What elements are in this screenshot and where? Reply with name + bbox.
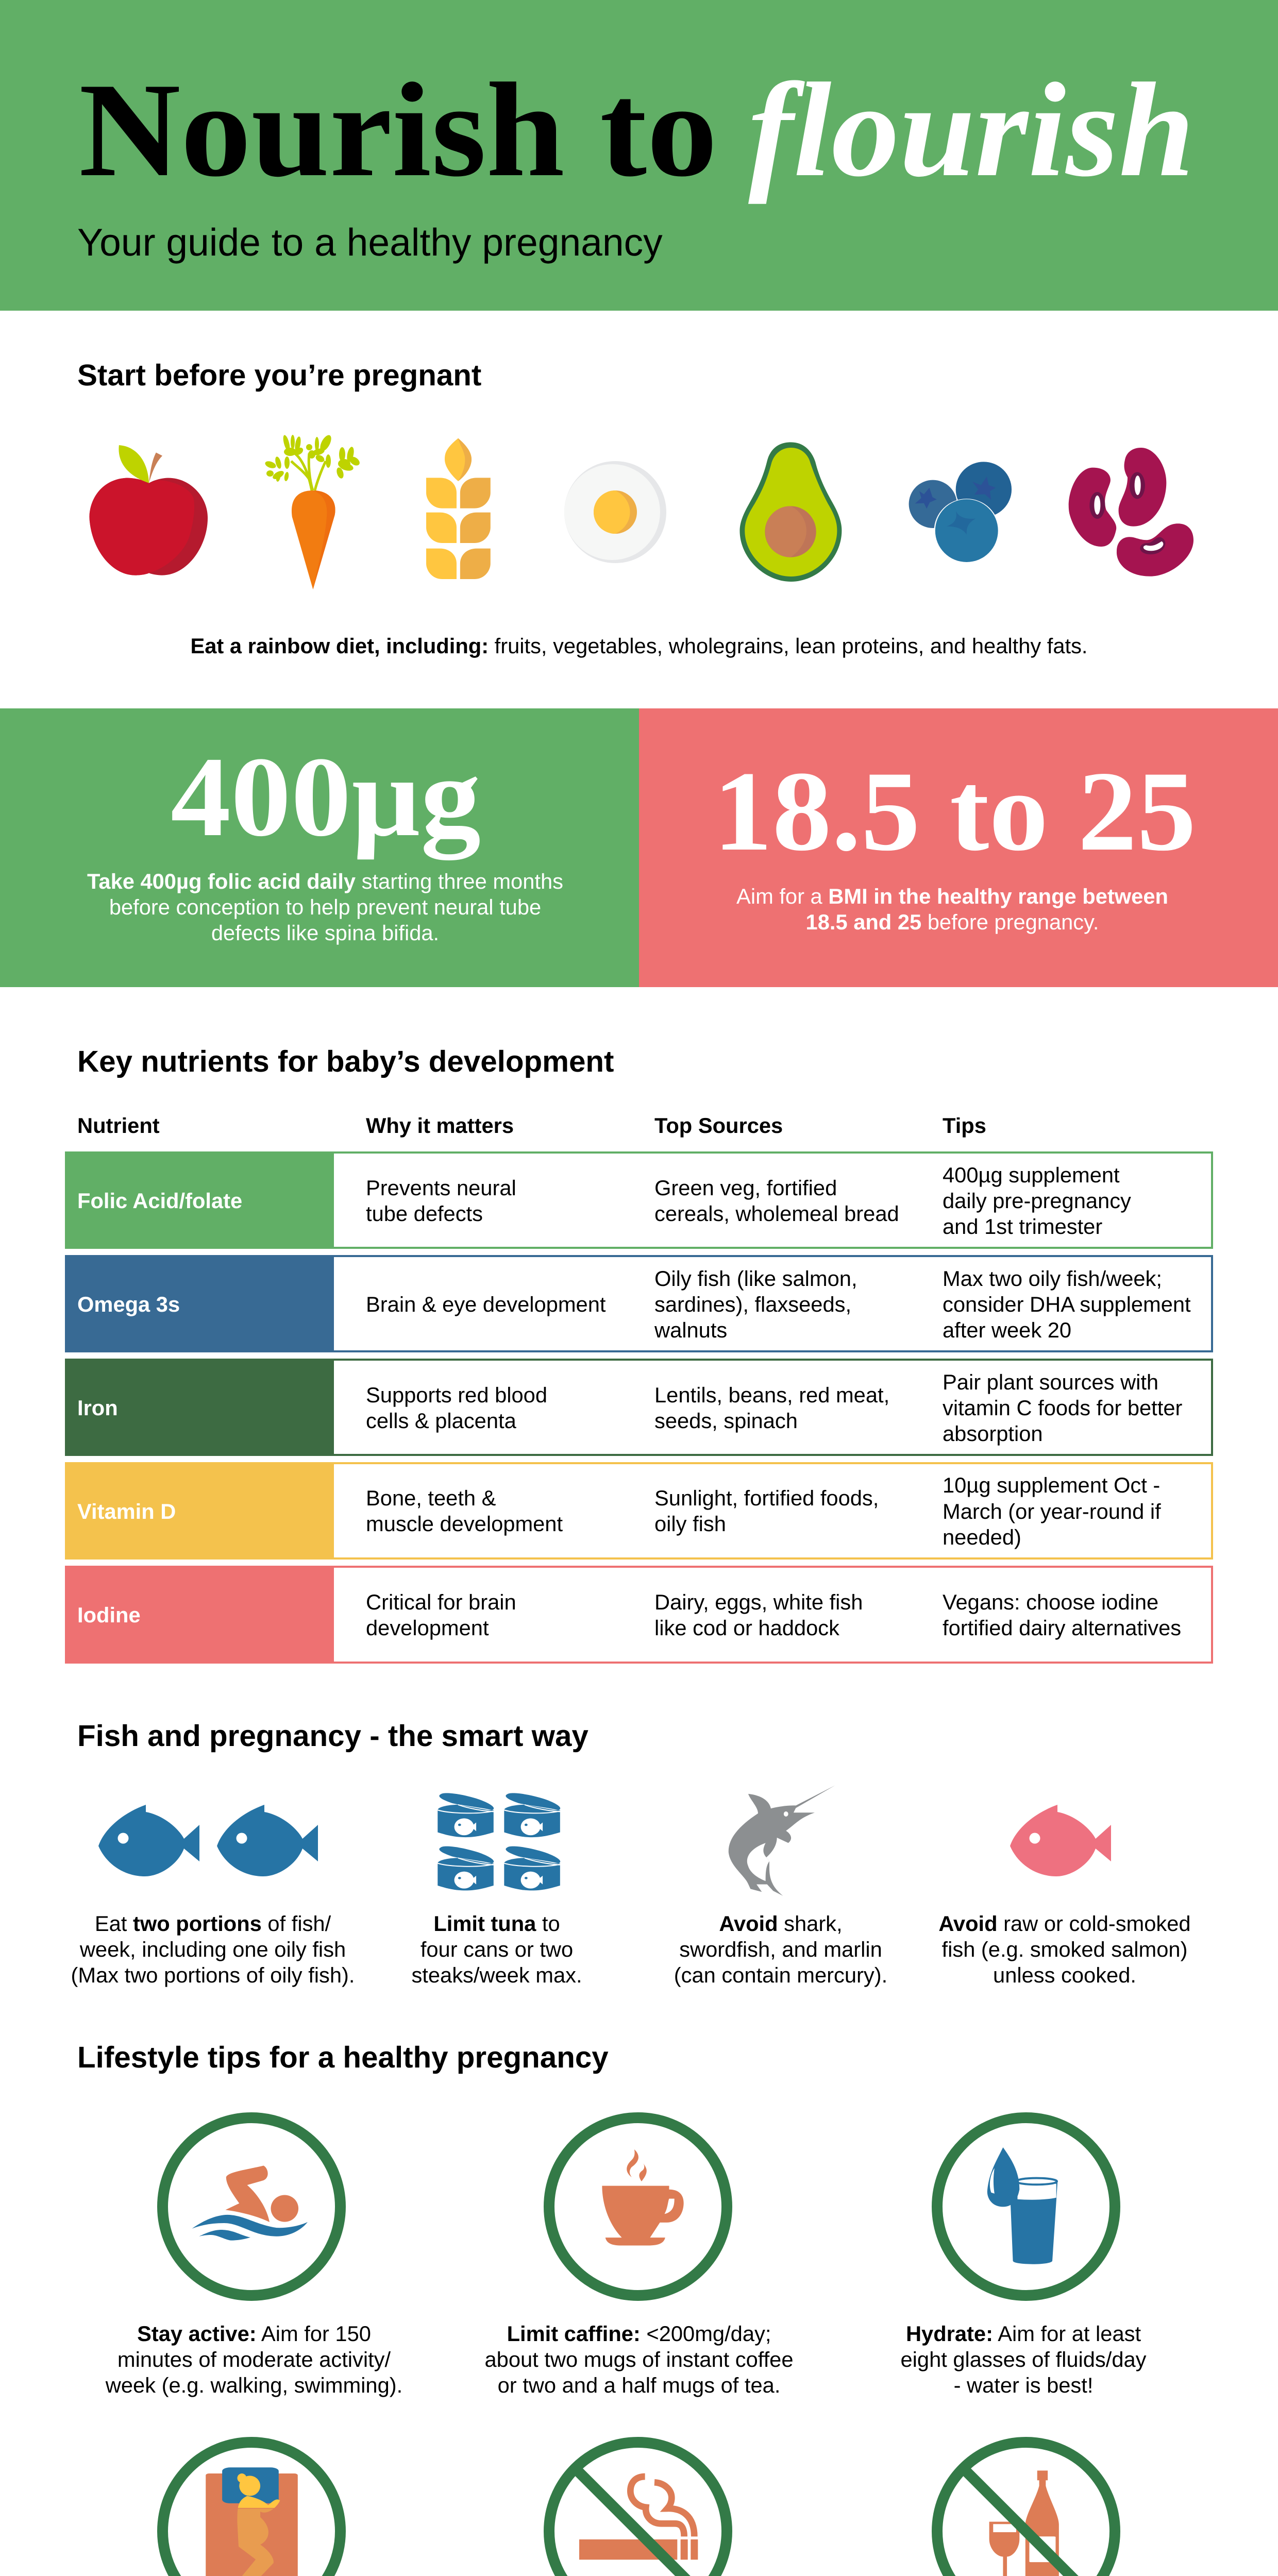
icon: no alcohol	[937, 2442, 1115, 2576]
heading: Fish and pregnancy - the smart way	[77, 1719, 588, 1753]
caption: avoid shark: swordfish, and marlin	[679, 1937, 882, 1961]
heading: Key nutrients for baby’s development	[77, 1045, 614, 1078]
icon: wheat	[426, 438, 491, 579]
row: vitamin D: Bone, teeth &	[366, 1486, 496, 1510]
row: iron: cells & placenta	[366, 1409, 517, 1433]
subtitle: Your guide to a healthy pregnancy	[77, 221, 663, 264]
row: folic acid: tube defects	[366, 1201, 483, 1226]
row: folic acid: Green veg, fortified	[654, 1176, 837, 1200]
icon: water glass	[937, 2117, 1115, 2296]
row: iron: Supports red blood	[366, 1383, 547, 1407]
table header: Top Sources	[654, 1113, 783, 1138]
row: vitamin D: Vitamin D	[77, 1499, 176, 1523]
row: omega 3s: after week 20	[943, 1318, 1071, 1342]
row: iodine: fortified dairy alternatives	[943, 1616, 1181, 1640]
row: vitamin D: March (or year-round if	[943, 1499, 1161, 1523]
title: Nourish to	[79, 55, 717, 205]
icon: marlin	[729, 1785, 835, 1896]
row: omega 3s: Oily fish (like salmon,	[654, 1266, 857, 1291]
heading: Lifestyle tips for a healthy pregnancy	[77, 2041, 609, 2074]
icon: carrot	[264, 433, 361, 589]
row: omega 3s: sardines), flaxseeds,	[654, 1292, 851, 1316]
caption: avoid raw fish: unless cooked.	[993, 1963, 1136, 1987]
text: BMI advice: Aim for a BMI in the healthy range between	[736, 884, 1168, 908]
icon: coffee cup	[549, 2117, 727, 2296]
row: iodine	[65, 1566, 1213, 1664]
panel: key nutrients	[65, 1045, 1213, 1664]
text: folic acid advice: Take 400µg folic acid daily starting three months	[87, 869, 563, 893]
stat: 18.5 to 25: 18.5 to 25	[713, 748, 1196, 875]
row: iodine: development	[366, 1616, 489, 1640]
heading: Start before you’re pregnant	[77, 359, 481, 392]
caption: limit tuna: four cans or two	[421, 1937, 573, 1961]
row: vitamin D: 10µg supplement Oct -	[943, 1473, 1160, 1497]
title	[79, 55, 1195, 205]
icon: two blue fish	[98, 1805, 318, 1876]
icon: apple	[89, 445, 208, 575]
text: BMI advice: 18.5 and 25	[806, 910, 921, 934]
caption: stay active: minutes of moderate activity/	[117, 2347, 391, 2371]
row: omega 3s: walnuts	[654, 1318, 727, 1342]
caption: hydrate: - water is best!	[954, 2373, 1093, 2397]
row: omega 3s	[65, 1255, 1213, 1352]
row: iodine: Critical for brain	[366, 1590, 516, 1614]
table header: Nutrient	[77, 1113, 160, 1138]
panel: BMI stat	[639, 708, 1278, 987]
text: folic acid advice: defects like spina bifida.	[211, 921, 439, 945]
caption: avoid shark: (can contain mercury).	[674, 1963, 887, 1987]
row: iodine: Dairy, eggs, white fish	[654, 1590, 863, 1614]
caption: limit tuna: Limit tuna to	[433, 1911, 560, 1936]
row: omega 3s: Max two oily fish/week;	[943, 1266, 1162, 1291]
row: folic acid: and 1st trimester	[943, 1214, 1102, 1239]
caption: rainbow diet: Eat a rainbow diet, including: fruits, vegetables, wholegrains, lean proteins, and healthy fats.	[190, 634, 1088, 658]
caption: hydrate: eight glasses of fluids/day	[900, 2347, 1147, 2371]
icon: pink fish	[1010, 1805, 1111, 1876]
panel: header	[0, 0, 1278, 311]
caption: avoid raw fish: fish (e.g. smoked salmon)	[942, 1937, 1187, 1961]
panel: start before you're pregnant	[77, 359, 1193, 658]
text: BMI advice: before pregnancy.	[928, 910, 1099, 934]
title: flourish	[748, 55, 1195, 205]
caption: hydrate: Hydrate: Aim for at least	[906, 2321, 1141, 2346]
row: iron: vitamin C foods for better	[943, 1396, 1182, 1420]
row: omega 3s: Brain & eye development	[366, 1292, 606, 1316]
caption: limit tuna: steaks/week max.	[411, 1963, 582, 1987]
row: folic acid: daily pre-pregnancy	[943, 1189, 1131, 1213]
row: folic acid: 400µg supplement	[943, 1163, 1120, 1187]
row: vitamin D: oily fish	[654, 1512, 726, 1536]
caption: avoid shark: Avoid shark,	[719, 1911, 843, 1936]
table header	[77, 1113, 986, 1138]
caption: limit caffeine: or two and a half mugs of tea.	[498, 2373, 780, 2397]
icon: blueberries	[909, 462, 1012, 563]
row: folic acid	[65, 1151, 1213, 1249]
row: folic acid: cereals, wholemeal bread	[654, 1201, 899, 1226]
row: omega 3s: Omega 3s	[77, 1292, 180, 1316]
row: vitamin D: Sunlight, fortified foods,	[654, 1486, 879, 1510]
row: vitamin D: muscle development	[366, 1512, 563, 1536]
row: iron: Lentils, beans, red meat,	[654, 1383, 889, 1407]
panel: folic acid stat	[0, 708, 639, 987]
row: vitamin D	[65, 1462, 1213, 1560]
row: iodine: Vegans: choose iodine	[943, 1590, 1158, 1614]
text: folic acid advice: before conception to help prevent neural tube	[109, 895, 541, 919]
icon: kidney beans	[1069, 448, 1193, 577]
row: iron: Pair plant sources with	[943, 1370, 1158, 1394]
icon: sleep	[163, 2442, 340, 2576]
icon: no smoking	[549, 2442, 727, 2576]
caption: limit caffeine: about two mugs of instant coffee	[484, 2347, 794, 2371]
table header: Why it matters	[366, 1113, 514, 1138]
row: iron: seeds, spinach	[654, 1409, 798, 1433]
caption: stay active: week (e.g. walking, swimming).	[105, 2373, 402, 2397]
row: iodine: Iodine	[77, 1603, 141, 1627]
row: vitamin D: needed)	[943, 1525, 1021, 1549]
table header: Tips	[943, 1113, 986, 1138]
caption: two portions: week, including one oily fish	[79, 1937, 346, 1961]
row: folic acid: Folic Acid/folate	[77, 1189, 242, 1213]
icon: tuna cans	[438, 1793, 560, 1890]
panel: lifestyle tips	[76, 2041, 1188, 2576]
row: iron: absorption	[943, 1421, 1043, 1446]
caption: stay active: Stay active: Aim for 150	[137, 2321, 371, 2346]
icon: avocado	[739, 442, 842, 582]
stat: 400µg: 400µg	[171, 734, 481, 860]
caption: two portions: (Max two portions of oily fish).	[71, 1963, 355, 1987]
row: iodine: like cod or haddock	[654, 1616, 839, 1640]
row: folic acid: Prevents neural	[366, 1176, 516, 1200]
panel: fish and pregnancy	[71, 1719, 1191, 1987]
icon: swimming	[163, 2117, 340, 2296]
caption: two portions: Eat two portions of fish/	[95, 1911, 331, 1936]
row: omega 3s: consider DHA supplement	[943, 1292, 1191, 1316]
caption: limit caffeine: Limit caffine: <200mg/day;	[507, 2321, 771, 2346]
caption: avoid raw fish: Avoid raw or cold-smoked	[938, 1911, 1191, 1936]
row: iron: Iron	[77, 1396, 118, 1420]
row: iron	[65, 1359, 1213, 1456]
icon: egg	[564, 461, 666, 563]
